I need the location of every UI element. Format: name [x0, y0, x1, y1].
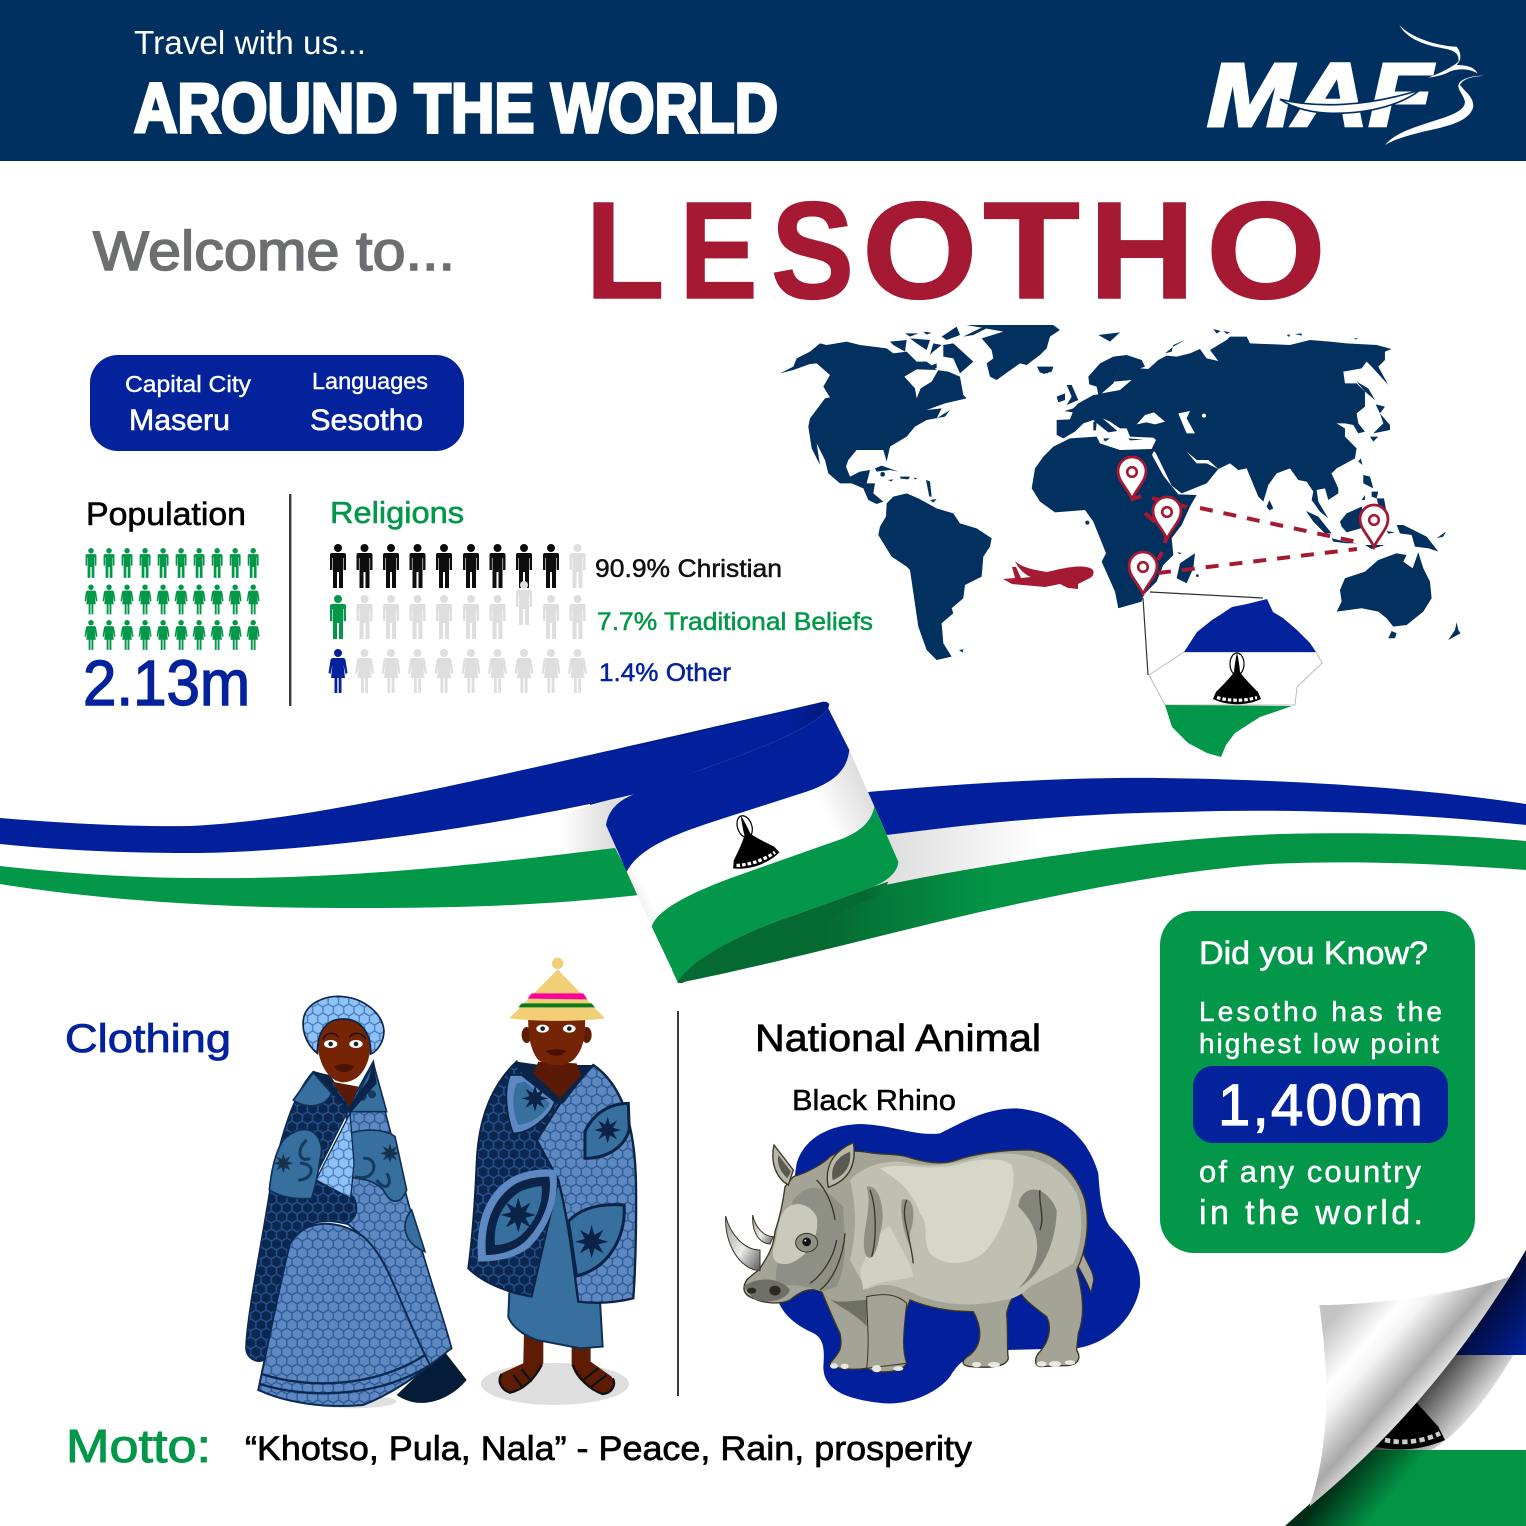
- Arctic islands: [890, 325, 993, 373]
- header bar: [0, 0, 1526, 161]
- christian share: 90.9% Christian: [595, 555, 782, 583]
- Iceland: [1037, 367, 1053, 373]
- population value: 2.13m: [83, 647, 250, 719]
- panel heading: Did you Know?: [1199, 935, 1428, 971]
- welcome text: Welcome to...: [93, 219, 455, 282]
- flag emblem: [718, 808, 781, 873]
- Caribbean islands: [875, 466, 937, 503]
- MAF logo: MAF: [1207, 46, 1434, 146]
- country title: [586, 174, 1326, 328]
- figure: man in blanket: [468, 958, 636, 1405]
- panel: population: [83, 496, 260, 719]
- highlight value: 1,400m: [1218, 1073, 1423, 1138]
- blue band: [1184, 599, 1316, 652]
- highlight value: [1193, 1066, 1448, 1143]
- country title: T: [983, 174, 1080, 328]
- MAF logo: [1207, 25, 1485, 146]
- pictogram rows: [328, 544, 587, 693]
- motto text: “Khotso, Pula, Nala” - Peace, Rain, prosperity: [245, 1430, 972, 1468]
- religions heading: Religions: [330, 495, 464, 530]
- fact line 4: in the world.: [1199, 1194, 1423, 1232]
- country title: E: [680, 174, 758, 328]
- panel: did you know: [1160, 911, 1475, 1253]
- fact line 2: highest low point: [1199, 1028, 1439, 1059]
- European and African islands: [1037, 329, 1230, 583]
- inland seas: [1102, 367, 1218, 469]
- country title: O: [862, 174, 978, 328]
- front flag: [590, 702, 898, 983]
- panel: capital and languages: [90, 355, 464, 451]
- Lesotho map: [1143, 592, 1322, 757]
- animal name: Black Rhino: [792, 1085, 956, 1117]
- illustration: rhino on blue blob: [726, 1108, 1140, 1403]
- population heading: Population: [86, 496, 246, 532]
- header tagline: Travel with us...: [134, 24, 366, 61]
- emblem: [1213, 653, 1261, 704]
- clothing heading: Clothing: [65, 1017, 231, 1061]
- header title: AROUND THE WORLD: [134, 69, 778, 147]
- panel: religions: [328, 495, 873, 693]
- left ribbon: [0, 793, 640, 895]
- route lines: [1133, 496, 1357, 573]
- other share: 1.4% Other: [599, 659, 731, 687]
- South America: [878, 493, 992, 660]
- fact line 3: of any country: [1199, 1154, 1422, 1189]
- country title: H: [1089, 174, 1195, 328]
- figure: woman in blanket: [246, 996, 467, 1408]
- national animal heading: National Animal: [755, 1018, 1041, 1060]
- traditional share: 7.7% Traditional Beliefs: [597, 608, 873, 636]
- Eurasia and Africa: [1032, 329, 1461, 640]
- Asian islands and Australia: [1267, 333, 1461, 640]
- language value: Sesotho: [310, 404, 423, 437]
- motto label: Motto:: [66, 1420, 211, 1472]
- location pins: [1118, 457, 1388, 594]
- country title: O: [1206, 174, 1326, 328]
- green band: [1165, 705, 1292, 757]
- Greenland: [967, 325, 1060, 380]
- capital value: Maseru: [129, 404, 230, 437]
- languages label: Languages: [312, 368, 428, 394]
- flag ribbon: [0, 702, 1526, 983]
- plane: [1003, 561, 1094, 589]
- world map: [766, 325, 1461, 660]
- Americas and Greenland: [766, 325, 1060, 660]
- right ribbon: [868, 778, 1526, 838]
- fact line 1: Lesotho has the: [1199, 996, 1442, 1027]
- country title: S: [771, 174, 854, 328]
- page curl with flag: [1285, 1250, 1526, 1526]
- Hudson Bay: [904, 369, 938, 398]
- capital label: Capital City: [125, 371, 252, 397]
- country title: L: [586, 174, 664, 328]
- population pictogram: [85, 548, 260, 650]
